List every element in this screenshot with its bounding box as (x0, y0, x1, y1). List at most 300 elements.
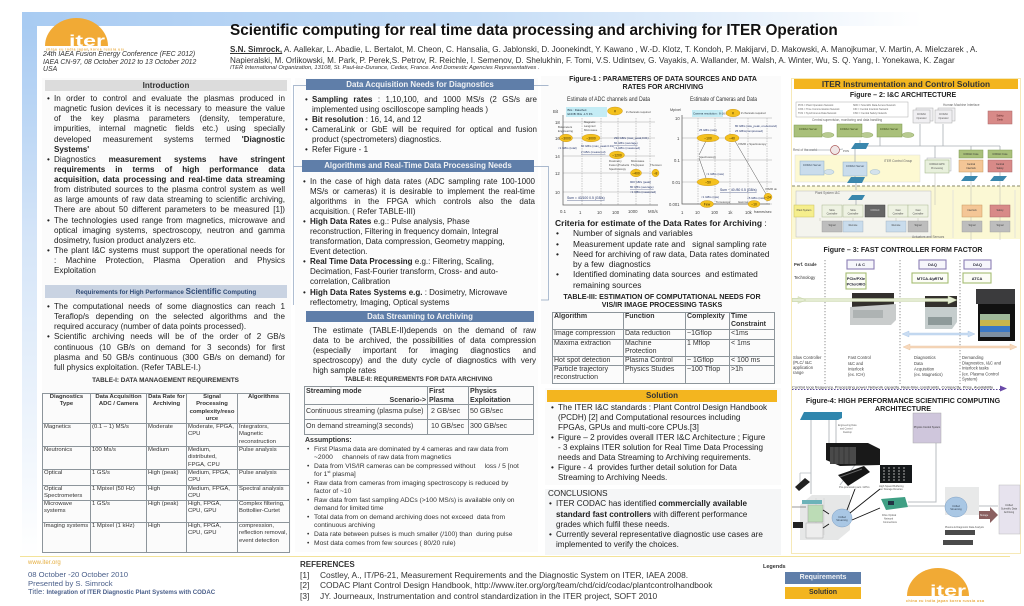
legend box: TCN = Synchronous Data Network (798, 112, 837, 115)
references: [2] (300, 580, 309, 590)
diagram: figure 2 I&C architecture: Controller (893, 212, 904, 216)
text: algorithms (303, 177, 535, 307)
heading: table III: VIS/IR IMAGE PROCESSING TASKS (602, 301, 722, 309)
text: criteria for estimate of data rates: Need for archiving of raw data, Data rates dominated (573, 249, 769, 259)
table I: data management requirements: Signal Processing complexity/reso urce (190, 394, 234, 422)
safety desk: Desk (997, 118, 1004, 122)
table I: data management requirements: High (148, 486, 160, 492)
title: Scientific computing for real time data processing and archiving for ITER Operation (230, 22, 838, 39)
legend: requirements (785, 572, 861, 584)
text: conclusions (548, 489, 763, 549)
table I: data management requirements: 1 GS/s (92, 501, 110, 507)
text: conclusions: standard fast controllers with different performance (556, 510, 747, 519)
form factor descriptions: (PLC/ I&C (793, 360, 812, 365)
heading: data streaming to archiving: Data Streaming to Archiving (367, 312, 473, 321)
chart: estimate of cameras and data: ~50 (705, 180, 711, 184)
interlock and safety systems (959, 150, 1012, 172)
chart: estimate of cameras and data: 25 GB/s(compressed) (735, 129, 763, 133)
diagram: figure 3 fast controller form factor (792, 259, 1017, 392)
diagram: figure 2 I&C architecture: Human Machine Interface (943, 103, 980, 107)
text: criteria for estimate of data rates: Number of signals and variables (573, 228, 693, 238)
background frame: left band (22, 26, 37, 556)
text: introduction: There are about 50 different parameters to be measured [1]) (54, 205, 285, 214)
text: introduction: as large amounts of raw data streaming to scientific archiving, (54, 195, 285, 204)
chart: estimate of ADC channels and data: 900 GB/s (peak) (630, 180, 651, 184)
text: solution: FPGAs, GPUs and multi-core CPUs.[3] (558, 423, 699, 432)
text: algorithms: Event detection. (310, 247, 367, 256)
text: data acquisition needs: product (spectrometers) diagnostics. (312, 135, 441, 144)
text: algorithms: High Data Rates Systems e.g. : Dosimetry, Microwave (310, 288, 507, 297)
diagram: figure 3 fast controller form factor: PCIe/cRIO (847, 282, 865, 286)
panel: middle column background (295, 78, 538, 552)
references: [3] (300, 591, 309, 601)
references: JY. Journeaux, Instrumentation and control standardization in the ITER project, SOFT 2010 (320, 591, 657, 601)
table I: data management requirements: Spectral analysis (239, 486, 284, 492)
text: data streaming: data to be archived, the possibilities of data compression (313, 336, 536, 345)
diagram: figure 2 I&C architecture: CODAC Server (880, 127, 898, 131)
text: solution: Figure – 2 provides overall ITER I&C Architecture ; Figure (558, 433, 765, 442)
table II: requirements for data archiving: First Plasma (429, 387, 454, 404)
heading: figure 4: ARCHITECTURE (875, 405, 931, 413)
panel: conclusions background (545, 489, 781, 555)
text: algorithms: reconstruction, Filtering in frequency domain, Integral (310, 227, 499, 236)
text: criteria for estimate of data rates: • (556, 249, 559, 259)
chart: estimate of cameras and data: Estimate of Cameras and Data (690, 96, 757, 103)
table I: data management requirements: Medium, FPGA, CPU (188, 486, 230, 499)
interlock and safety systems: CODAC Core (963, 153, 979, 156)
chart: estimate of ADC channels and data: ~3000 (586, 136, 596, 140)
footer: event details: Presented by S. Simrock (28, 579, 113, 588)
text: conclusions: CONCLUSIONS (548, 489, 608, 498)
chart: estimate of cameras and data: <1 GB/s (raw) (701, 195, 719, 199)
table II: requirements for data archiving: 50 GB/sec (470, 407, 503, 415)
authors: S.N. Simrock, A. Aallekar, L. Abadie, L. Bertalot, M. Cheon, C. Hansalia, G. Jablonski, D. Joonekindt, Y. Kawano , W.-D. Klotz, T. Kondoh, P. Makijarvi, D. Makowski, A. Manojkumar, V. Martin, A. Mielczarek , A. (230, 45, 978, 54)
table I: data management requirements: 100 Ms/s (92, 447, 116, 453)
form factor descriptions: Demanding (962, 355, 984, 360)
network interface card: Connections (883, 521, 898, 524)
table III: computational needs: <1ms (731, 330, 748, 337)
text: data acquisition needs: implemented using oscilloscope sampling heads ) (312, 105, 488, 114)
text: data streaming: The estimate (TABLE-II)depends on the demand of raw (313, 326, 536, 335)
table II: requirements for data archiving: Streaming mode (306, 387, 362, 395)
references: Costley, A., IT/P6-21, Measurement Requirements and the Diagnostic System on ITER, IAEA 2008. (320, 570, 688, 580)
chart: estimate of cameras and data: ~10 (751, 202, 757, 206)
network interface card (881, 497, 908, 524)
text: data streaming: spectroscopy) and the duty cycle of diagnostics with very (313, 356, 536, 365)
text: algorithms: algorithms in the FPGA which controls also the data (310, 197, 535, 206)
form factor descriptions: I&C and (848, 361, 864, 366)
form factor descriptions: (ex. ICH) (848, 372, 865, 377)
diagram: figure 2 I&C architecture: Signal (915, 224, 922, 227)
form factor descriptions: Slow Controller (793, 355, 822, 360)
diagram: figure 2 I&C architecture: Interlock (967, 209, 977, 212)
chart: estimate of ADC channels and data: ~3000 (561, 136, 571, 140)
table I: data management requirements: Magnetics (44, 424, 71, 430)
chart: estimate of ADC channels and data: Microwave (584, 128, 598, 132)
heading: table III (563, 293, 761, 309)
text: assumptions: Most data comes from few sources ( 80/20 rule) (314, 540, 456, 547)
legend box: CSN = Central Safety Network (853, 112, 888, 115)
text: introduction: : Machine Protection, Plasma Operation and Physics (54, 256, 285, 265)
chart: estimate of cameras and data: 1k (728, 210, 733, 215)
diagram: figure 2 I&C architecture: CODAC (939, 112, 948, 116)
text: assumptions: Data from VIS/IR cameras can be compressed without loss / 5 [not (314, 463, 519, 470)
diagram: figure 2 I&C architecture: Rest of the world (793, 148, 817, 152)
diagram: figure 2 I&C architecture: Plant System I&C (815, 191, 841, 195)
chart: estimate of ADC channels and data: Sum = 40/100 0.5 (GB/s) (567, 196, 605, 200)
text: computing requirements (47, 302, 285, 372)
text: assumptions: demand for limited time (314, 505, 384, 512)
table I: data management requirements: High, FPGA, CPU, GPU (188, 501, 221, 514)
server rack (826, 443, 880, 466)
chart: estimate of cameras and data: VIS/IR ok (765, 187, 777, 191)
chart: estimate of cameras and data: ~100 (704, 136, 712, 140)
equipment racks (850, 289, 1015, 341)
black camera and sensor (793, 478, 810, 528)
table I: data management requirements: Data Rate for Archiving (148, 394, 185, 407)
data stream oval (832, 509, 852, 527)
text: assumptions: ~2000 channels of raw data from magnetics (314, 454, 451, 461)
diagram: figure 2 I&C architecture: Remote (849, 224, 858, 227)
interlock and safety systems: Central (996, 163, 1004, 166)
chart: estimate of ADC channels and data: 10 (597, 210, 602, 215)
chart: estimate of ADC channels and data: Thompson (631, 163, 645, 167)
diagram: figure 2 I&C architecture (792, 102, 1020, 240)
heading: solution: Solution (646, 391, 678, 400)
frame lines: data acquisition box (293, 85, 549, 305)
text: introduction: from distributed sources to the plasma control system as well (54, 185, 285, 194)
footer: event details (28, 560, 215, 596)
chart: estimate of cameras and data: # channels required (741, 111, 766, 115)
legend box: CIN = Central Interlock Network (853, 108, 889, 111)
legend box: POS = Plant Operation Network (798, 104, 834, 107)
chart: estimate of ADC channels and data: <1 GB/s (measured) (614, 146, 640, 150)
table III: computational needs: < 1ms (731, 340, 750, 347)
chart: estimate of cameras and data: 10 (675, 116, 680, 121)
plant region (792, 155, 1020, 239)
blue range arrow (902, 331, 975, 337)
chart: estimate of ADC channels and data: Spectroscopy (609, 167, 627, 171)
text: introduction: magnetic fusion devices it is necessary to measure the value (54, 104, 285, 113)
diagram: figure 2 I&C architecture: CODAC Server (846, 164, 864, 168)
table III: computational needs: Physics Studies (625, 366, 674, 373)
text: data acquisition needs: CameraLink or GbE will be required for optical and fusion (312, 125, 537, 134)
table I: data management requirements: Imaging systems (44, 523, 88, 529)
form factor descriptions: Data (914, 361, 924, 366)
diagram: figure 2 I&C architecture: Operator (938, 116, 949, 120)
form factor descriptions: application (793, 365, 814, 370)
form factor descriptions: Interlock tasks (962, 366, 989, 370)
diagram: figure 4 high performance computing architecture: Engineering Data (838, 424, 857, 427)
text: criteria for estimate of data rates: • (556, 228, 559, 238)
chart: estimate of ADC channels and data: 12 (555, 171, 560, 176)
table II: requirements for data archiving: On demand streaming(3 seconds) (306, 422, 413, 430)
table I: data management requirements: Moderate, FPGA, CPU (188, 424, 234, 437)
table III: computational needs: Data reduction (625, 330, 671, 337)
chart: estimate of cameras and data: 100 (711, 210, 719, 215)
table I: data management requirements: 1 Mpixel (1 kHz) (92, 523, 135, 529)
chart: estimate of ADC channels and data: 100 (612, 210, 620, 215)
panel: figure 1 column background (541, 76, 781, 384)
heading: table III: TABLE-III: ESTIMATION OF COMPUTATIONAL NEEDS FOR (563, 293, 761, 301)
legend box (796, 102, 908, 117)
text: computing requirements: The computational needs of some diagnostics can reach 1 (54, 302, 285, 311)
text: criteria for estimate of data rates: Identified dominating data sources and estimated (573, 269, 758, 279)
text: assumptions: Data rate between pulses is much smaller (/100) than during pulse (314, 531, 512, 538)
archive box: Archiving (1004, 511, 1015, 514)
text: solution: Figure - 4 provides further detail solution for Data (558, 463, 737, 472)
table III: computational needs: Particle trajectory reconstruction (554, 366, 608, 381)
chart: estimate of ADC channels and data: 60 GB/s (max_peak.0.01) (581, 144, 614, 148)
diagram: figure 2 I&C architecture: CODAC Server (803, 163, 821, 167)
diagram: figure 2 I&C architecture: CODAC Server (840, 127, 858, 131)
table III: computational needs: Protection (625, 348, 657, 355)
chart: estimate of cameras and data: Mpixel (670, 108, 681, 112)
storage arrow: Storage (980, 514, 989, 517)
text: assumptions: for 1st plasma] (314, 469, 356, 478)
table I: data management requirements: High (peak) (148, 470, 178, 476)
text: algorithms: acquisition. ( Refer TABLE-III) (310, 207, 416, 216)
legend label: Legends (763, 564, 786, 570)
diagram: figure 2 I&C architecture: Controller (827, 212, 838, 216)
text: algorithms: Decimation, Fast-Fourier transform, Cross- and auto- (310, 267, 498, 276)
table II: requirements for data archiving: Continuous streaming (plasma pulse) (306, 407, 424, 415)
chart: estimate of ADC channels and data: 1000 (628, 209, 638, 214)
text: data acquisition needs: Refer Figure - 1 (312, 145, 368, 154)
heading: data acquisition needs: Data Acquisition Needs for Diagnostics (346, 80, 494, 89)
conference text (43, 50, 196, 73)
heading: requirements for high performance scientific computing (45, 285, 287, 298)
legend box: SDN = Scientific Data Access Network (853, 104, 896, 107)
text: criteria for estimate of data rates: • (556, 238, 559, 248)
text: algorithms: MS/s or cameras) it is desirable to implement the real-time (310, 187, 535, 196)
panel: left column background (42, 78, 291, 552)
heading: table II: TABLE-II: REQUIREMENTS FOR DATA ARCHIVING (344, 376, 493, 383)
text: introduction (47, 94, 286, 275)
table III: computational needs: ~ 1Gflop (687, 357, 714, 364)
panel: right column background (791, 78, 1021, 554)
table I: data management requirements: Optical (44, 470, 62, 476)
chart: estimate of ADC channels and data: ~1200 (612, 154, 622, 158)
text: algorithms: reflectometry, Imaging, Optical systems (310, 298, 449, 307)
diagram: figure 2 I&C architecture: Slow (829, 209, 835, 212)
diagram: figure 4 high performance computing architecture: Desktop (843, 431, 852, 434)
table II: requirements for data archiving: 300 GB/sec (470, 422, 507, 430)
chart: estimate of ADC channels and data: 10 (555, 190, 560, 195)
text: introduction: impurities, internal magnetic fields etc.) using specially (54, 124, 285, 133)
chart: estimate of ADC channels and data: Engineering (558, 129, 573, 133)
chart: estimate of ADC channels and data: 0.1 (560, 209, 567, 214)
references: REFERENCES (300, 560, 355, 569)
chart: estimate of cameras and data: ~24 (765, 196, 771, 200)
chart: estimate of cameras and data: Gamma (738, 200, 748, 204)
high speed memory: on Storage Devices (880, 487, 903, 491)
right crate and oval: Streaming (950, 508, 962, 511)
heading: algorithms and real-time data processing: Algorithms and Real-Time Data Processing Needs (324, 161, 512, 170)
chart: estimate of ADC channels and data: 16 (555, 136, 560, 141)
CODAC servers (794, 124, 902, 137)
text: assumptions: Total data from on demand archiving does not exceed data from (314, 514, 505, 521)
affiliation: ITER International Organization, 13108, St. Paul-lez-Durance, Cedex, France. And Domestic Agencies Representatives . (230, 65, 540, 71)
form factor descriptions (793, 355, 1002, 382)
diagram: figure 2 I&C architecture: Signal (969, 224, 976, 227)
table III: computational needs: >1h (731, 366, 743, 373)
text: solution (551, 403, 767, 482)
logo: ITER top: china eu india japan korea russia usa (46, 48, 124, 52)
text: introduction: Diagnostics measurement systems have stringent (54, 155, 285, 164)
table III: computational needs: ~1Gflop (687, 330, 712, 337)
table III: computational needs: Plasma Control (625, 357, 673, 364)
switches (847, 143, 1007, 200)
chart: estimate of ADC channels and data: 2 GB/s (measured) (581, 150, 605, 154)
chart: estimate of ADC channels and data: <1 GB/s (measured) (630, 190, 656, 194)
text: introduction: dosimetry, fusion product analyzers etc. (54, 236, 196, 245)
plant controllers (794, 205, 1010, 217)
table I: data management requirements: (0.1 – 1) MS/s (92, 424, 129, 430)
heading: Introduction (45, 80, 287, 91)
text: data streaming: (especially important for imaging diagnostics and (313, 346, 536, 355)
diagram: figure 2 I&C architecture: CODAC Server (799, 127, 817, 131)
chart: estimate of ADC channels and data: MS/s (648, 209, 658, 214)
heading: Introduction: Introduction (143, 81, 189, 90)
network interface card: Fibre Optical (882, 514, 897, 517)
background frame: top band (22, 12, 922, 26)
text: data streaming (313, 326, 536, 375)
interlock and safety systems: Interlock (966, 167, 976, 170)
divider (20, 556, 1010, 557)
text: conclusions: Currently several representative diagnostic use cases are (556, 530, 763, 539)
chart: estimate of ADC channels and data: # (614, 110, 616, 114)
chart: estimate of cameras and data: 0.01 (672, 180, 681, 185)
purple physics box (913, 413, 941, 443)
table III: computational needs (552, 312, 775, 384)
chart: estimate of cameras and data: 10 (695, 210, 700, 215)
text: introduction: Systems' (54, 145, 89, 154)
chart: estimate of cameras and data (669, 96, 777, 215)
table III: computational needs: < 100 ms (731, 357, 760, 364)
footer: event details: Title: Integration of ITER Diagnostic Plant Systems with CODAC (28, 587, 215, 596)
chart: estimate of ADC channels and data: 18 (555, 120, 560, 125)
diagram: figure 3 fast controller form factor: I & C (856, 262, 865, 267)
table II: requirements for data archiving (304, 386, 534, 435)
logo: ITER top (45, 18, 124, 52)
form factor descriptions: Acquisition (914, 366, 935, 372)
heading: figure 1 (569, 76, 757, 91)
chart: estimate of ADC channels and data: ENOB: Bits -1.5 FS (568, 112, 592, 116)
text: computing requirements: Scientific archiving needs will be of the order of 2 GB/s (54, 332, 285, 341)
text: introduction: of the key plasma parameters (density, temperature, (54, 114, 285, 123)
chart: estimate of ADC channels and data: ~8 (654, 172, 658, 176)
chart: estimate of cameras and data: Sum ~ 40 /80 0.5 (GB/s) (720, 188, 757, 192)
table I: data management requirements: Medium, distributed, FPGA, CPU (188, 447, 220, 468)
heading: figure 2: Figure – 2: I&C ARCHITECTURE (850, 92, 956, 99)
diagram: figure 2 I&C architecture: Operator (916, 116, 927, 120)
text: introduction: requirements in terms of high performance data (54, 165, 285, 174)
chart: estimate of cameras and data: ~40 (729, 136, 735, 140)
archive box: Unified (1005, 504, 1013, 507)
text: assumptions: First Plasma data are dominated by 4 cameras and raw data from (314, 446, 508, 453)
chart: estimate of ADC channels and data: 290 GB/s (max_peak,0.01) (614, 136, 649, 140)
text: algorithms: Real Time Data Processing e.g.: Filtering, Scaling, (310, 257, 494, 266)
text: data acquisition needs: Bit resolution : 16, 14, and 12 (312, 115, 421, 124)
chart: estimate of ADC channels and data: Bolometers (558, 125, 573, 129)
chart: estimate of cameras and data: frames/sec (754, 210, 772, 214)
table I: data management requirements (42, 393, 290, 553)
text: assumptions: continuous archiving (314, 522, 375, 529)
diagram: figure 4 high performance computing architecture (792, 412, 1020, 545)
text: introduction: In order to control and evaluate the plasmas produced in (54, 94, 285, 103)
table I: data management requirements: Integrators, Magnetic reconstruction (239, 424, 276, 445)
CODAC HPC: Processing (931, 167, 944, 170)
diagram: figure 2 I&C architecture: Controller (848, 212, 859, 216)
chart: estimate of ADC channels and data: # channels required (626, 110, 651, 114)
table I: data management requirements: Diagnostics Type (50, 394, 83, 407)
heading: data acquisition needs (306, 79, 534, 90)
PON router: PON (843, 149, 849, 153)
text: conclusions: ITER CODAC has identified commercially available (556, 499, 747, 508)
chart: estimate of ADC channels and data: ~400 (632, 172, 640, 176)
text: solution: needs and Data Streaming to Archiving requirements. (558, 453, 751, 462)
text: criteria for estimate of data rates: Criteria for estimate of the Data Rates for Archiving : (555, 218, 767, 228)
text: criteria for estimate of data rates: Measurement update rate and signal sampling rate (573, 238, 767, 248)
CODAC HPC (925, 158, 951, 173)
data stream oval: Streaming (836, 519, 848, 522)
table III: computational needs: Time Constraint (731, 313, 766, 328)
logo: ITER top: iter (69, 33, 105, 50)
logo: ITER bottom: iter (930, 583, 966, 600)
heading: figure 1: Figure-1 : PARAMETERS OF DATA SOURCES AND DATA (569, 76, 757, 83)
form factor descriptions: (ex. Plasma Control (962, 372, 999, 376)
table I: data management requirements: compression, reflection removal, event detection (239, 523, 287, 544)
chart: estimate of cameras and data: <1 GB/s (raw) (706, 172, 724, 176)
form factor descriptions: Interlock (848, 366, 865, 372)
table III: computational needs: Function (625, 313, 655, 320)
interlock and safety systems: Safety (996, 167, 1004, 170)
diagram: figure 2 I&C architecture: Plant System (797, 209, 811, 212)
diagram: figure 2 I&C architecture: Fast (896, 209, 901, 212)
legend: solution: Solution (809, 589, 837, 596)
diagram: figure 2 I&C architecture: Safety (996, 209, 1004, 212)
logo: ITER bottom: china eu india japan korea russia usa (906, 599, 985, 603)
text: solution: Streaming to Archiving Needs. (558, 473, 667, 482)
criteria scale arrow: Control loop frequency, Processing power Network capacity, Real-time constraints, Compactly, Price, Availability (792, 386, 993, 390)
text: algorithms: transformation, Data compression, Geometry mapping, (310, 237, 505, 246)
text: introduction: acquisition, data processing and real-time data streaming (54, 175, 285, 184)
legend: requirements: Requirements (800, 574, 846, 581)
chart: estimate of cameras and data: Camera resolution : 8-16 bit (693, 112, 729, 116)
text: assumptions (305, 436, 519, 547)
heading: data streaming to archiving (306, 311, 534, 322)
conference text: 24th IAEA Fusion Energy Conference (FEC 2012) (43, 51, 195, 58)
safety desk: Safety (996, 114, 1004, 118)
text: conclusions: grades which fulfil these needs. (556, 520, 669, 529)
legend: solution (785, 587, 861, 599)
table II: requirements for data archiving: Scenario-> (390, 396, 426, 404)
diagram: figure 3 fast controller form factor: MTCA.4/µRTM (917, 276, 943, 281)
references: CODAC Plant Control Design Handbook, http://www.iter.org/org/team/chd/cid/codac/plantcontrolhandbook (320, 580, 712, 590)
text: computing requirements: Teraflop/s depending on the selected algorithms and the (54, 312, 285, 321)
form factor descriptions: Fast Control (848, 355, 871, 360)
heading: ITER instrumentation and control solution: ITER Instrumentation and Control Solution (822, 79, 990, 89)
footer: event details: 08 October -20 October 2010 (28, 570, 128, 579)
CODAC HPC: CODAC HPC (929, 162, 945, 166)
diagram: figure 2 I&C architecture: Signal (997, 224, 1004, 227)
diagram: figure 2 I&C architecture: ITER Control Group (884, 159, 912, 163)
table II: requirements for data archiving: 10 GB/sec (431, 422, 464, 430)
chart: estimate of cameras and data: 0.001 (669, 202, 680, 207)
diagram: figure 2 I&C architecture: Slow (850, 209, 856, 212)
chart: estimate of ADC channels and data: Bits : Datarheit (568, 108, 587, 112)
